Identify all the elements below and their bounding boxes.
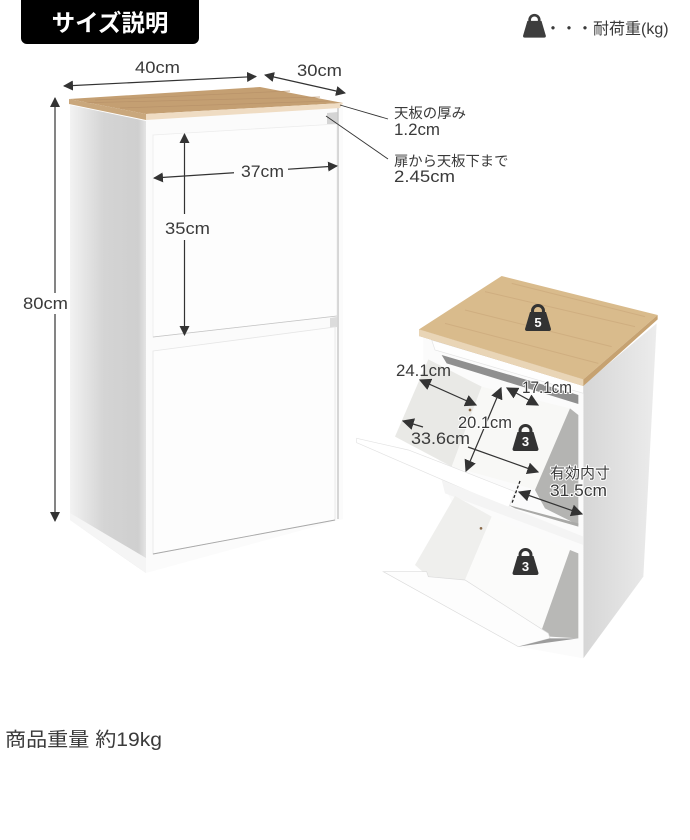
cabinet front	[146, 107, 343, 573]
right wall	[535, 408, 578, 525]
cabinet side	[70, 105, 146, 573]
icon: weight 5	[525, 306, 551, 331]
dimension: 30cm: 30cm	[297, 62, 342, 80]
dimension: 33.6cm	[403, 421, 538, 472]
back wall	[452, 387, 570, 490]
back wall	[465, 517, 570, 630]
title	[21, 0, 199, 44]
dimension: inner 31.5cm: 有効内寸	[550, 465, 610, 482]
upper bin	[357, 359, 578, 527]
lower door	[153, 327, 335, 554]
dimension: 80cm: 80cm	[23, 295, 68, 313]
legend: load capacity	[523, 15, 669, 38]
legend: load capacity: ・・・耐荷重(kg)	[545, 20, 669, 38]
dimension: 17.1cm	[507, 379, 572, 405]
divider	[442, 480, 583, 545]
callout: door to top board: 2.45cm	[394, 168, 455, 186]
callout: top board thickness	[340, 105, 466, 139]
dimension: 40cm: 40cm	[135, 59, 180, 77]
dimension: inner 31.5cm: 31.5cm	[550, 482, 607, 500]
icon: weight 5: 5	[534, 315, 542, 330]
flap	[383, 572, 550, 647]
dimension: 24.1cm	[396, 362, 476, 405]
wood top	[69, 87, 343, 114]
cabinet: front view	[69, 87, 343, 573]
dimension: 20.1cm	[458, 388, 512, 471]
left wall	[415, 496, 492, 580]
callout: door to top board: 扉から天板下まで	[394, 153, 508, 170]
icon: weight 3 lower: 3	[522, 559, 529, 574]
flap	[357, 438, 515, 508]
dimension: 37cm	[154, 162, 337, 182]
icon: weight 3 lower	[512, 550, 538, 575]
dimension: 80cm	[22, 98, 69, 521]
icon: weight 3 upper	[512, 426, 538, 451]
dimension: 35cm: 35cm	[165, 220, 210, 238]
dimension: 35cm	[163, 134, 211, 335]
dimension: inner 31.5cm	[512, 465, 610, 514]
cabinet side	[583, 323, 657, 658]
dimension: 40cm	[64, 59, 256, 86]
cabinet: open view	[357, 276, 658, 658]
icon: weight 3 upper: 3	[522, 434, 529, 449]
lower bin	[383, 496, 578, 647]
right wall	[542, 550, 578, 638]
callout: door to top board	[326, 116, 508, 186]
shelf peg hole	[480, 527, 482, 530]
title: サイズ説明	[52, 9, 168, 36]
dimension: 37cm: 37cm	[241, 163, 284, 181]
dimension: 33.6cm: 33.6cm	[411, 430, 470, 448]
cabinet front	[423, 335, 583, 658]
slot shadow	[442, 355, 578, 404]
left wall	[395, 359, 482, 467]
shelf peg hole	[469, 409, 471, 411]
dimension: 17.1cm: 17.1cm	[522, 379, 572, 397]
callout: top board thickness: 1.2cm	[394, 121, 440, 139]
callout: top board thickness: 天板の厚み	[394, 105, 466, 122]
dimension: 20.1cm: 20.1cm	[458, 414, 512, 432]
wood top	[419, 276, 658, 379]
upper door	[153, 124, 337, 337]
product weight: 商品重量 約19kg	[5, 729, 162, 751]
dimension: 24.1cm: 24.1cm	[396, 362, 451, 380]
dimension: 30cm	[265, 62, 345, 93]
icon: weight legend	[523, 15, 546, 38]
